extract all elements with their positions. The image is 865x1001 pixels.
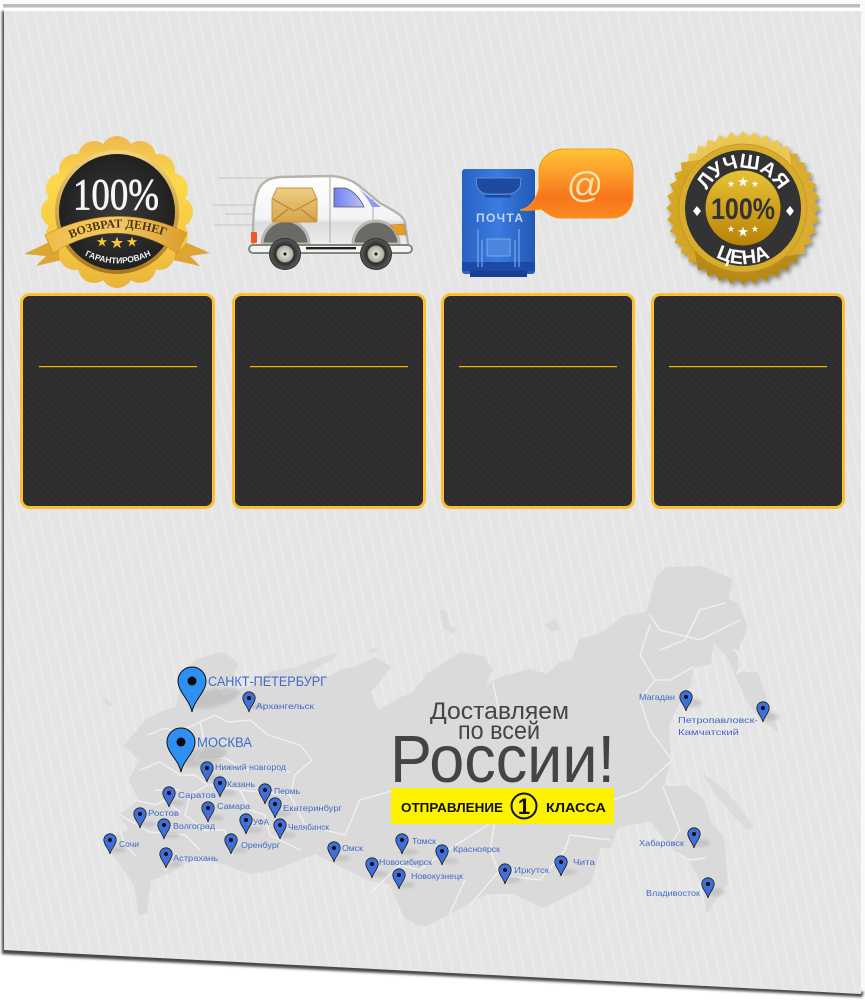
city labels: Владивосток	[646, 888, 700, 898]
seal stars and diamonds	[693, 176, 794, 236]
city labels: Камчатский	[678, 727, 739, 737]
city labels: Архангельск	[256, 701, 314, 711]
city labels: Томск	[412, 836, 436, 846]
city labels: Челябинск	[288, 822, 329, 832]
ribbon text: ВОЗВРАТ ДЕНЕГ	[68, 220, 168, 238]
100%: 100%	[73, 170, 159, 219]
islands	[103, 610, 754, 830]
city labels: Нижний новгород	[215, 762, 286, 772]
windows	[334, 188, 364, 207]
envelope	[272, 188, 317, 222]
region borders	[120, 603, 745, 913]
pin: Saint Petersburg	[178, 667, 328, 712]
banner: first class shipping: 1	[518, 794, 530, 819]
city labels: Пермь	[274, 786, 301, 796]
wheel arches	[262, 221, 399, 244]
seal bottom text: ЦЕНА	[716, 245, 770, 266]
city labels: Самара	[217, 801, 250, 811]
mailbox	[462, 169, 535, 277]
pin: Moscow	[167, 728, 252, 772]
banner: first class shipping	[391, 788, 614, 824]
city labels: Чита	[573, 857, 595, 867]
icon: mailbox with @ bubble	[462, 149, 633, 277]
city labels: Ростов	[148, 808, 180, 818]
city labels: Петропавловск-	[678, 715, 758, 725]
city labels: Саратов	[178, 790, 217, 800]
seal top text: ЛУЧШАЯ	[697, 154, 790, 190]
panel: card 4	[652, 294, 844, 508]
badge: 100% money back	[24, 136, 210, 288]
three stars	[97, 236, 137, 248]
city labels: Сочи	[119, 839, 139, 849]
guarantee text: ГАРАНТИРОВАН	[85, 250, 151, 264]
city labels: Хабаровск	[639, 838, 684, 848]
city labels: Омск	[342, 843, 363, 853]
panel: card 2	[234, 294, 424, 508]
city labels: Астрахань	[173, 853, 219, 863]
scalloped edge	[41, 136, 193, 288]
ribbon band	[45, 216, 187, 253]
seal 100%: 100%	[711, 193, 775, 226]
city labels: Екатеринбург	[283, 803, 342, 813]
icon: delivery van	[213, 176, 412, 270]
city pins	[104, 691, 769, 898]
city labels: Красноярск	[453, 844, 500, 854]
city labels: Иркутск	[514, 865, 549, 875]
city labels: Новокузнецк	[411, 871, 463, 881]
badge: best price seal	[666, 131, 824, 290]
panel: card 3	[442, 294, 634, 508]
heading: delivery across Russia: Доставляем	[430, 698, 569, 725]
speed lines	[213, 178, 272, 225]
city labels: Новосибирск	[379, 857, 432, 867]
pin: Moscow: МОСКВА	[197, 735, 252, 750]
mainland silhouette	[105, 567, 777, 925]
heading: delivery across Russia: по всей	[458, 717, 540, 745]
panel: card 1	[22, 294, 214, 508]
pin shadows	[108, 683, 779, 896]
city labels: Оренбург	[241, 840, 280, 850]
speech bubble	[520, 149, 633, 218]
city labels: УФА	[253, 817, 269, 827]
wheels	[269, 238, 301, 270]
van body	[253, 176, 408, 250]
city labels: Магадан	[639, 692, 675, 702]
bumper	[249, 245, 412, 253]
ribbon tails	[24, 238, 210, 266]
banner: first class shipping: КЛАССА	[546, 800, 607, 815]
city labels: Казань	[227, 779, 256, 789]
map of Russia	[103, 567, 779, 925]
heading: delivery across Russia: России!	[390, 722, 615, 797]
city labels: Волгоград	[173, 821, 215, 831]
pin: Saint Petersburg: САНКТ-ПЕТЕРБУРГ	[208, 674, 328, 689]
@ symbol: @	[567, 164, 603, 205]
city labels	[119, 692, 758, 898]
head and tail lights	[390, 224, 406, 235]
serrated edge	[666, 131, 820, 285]
mailbox label: ПОЧТА	[476, 211, 523, 225]
banner: first class shipping: ОТПРАВЛЕНИЕ	[401, 800, 503, 815]
